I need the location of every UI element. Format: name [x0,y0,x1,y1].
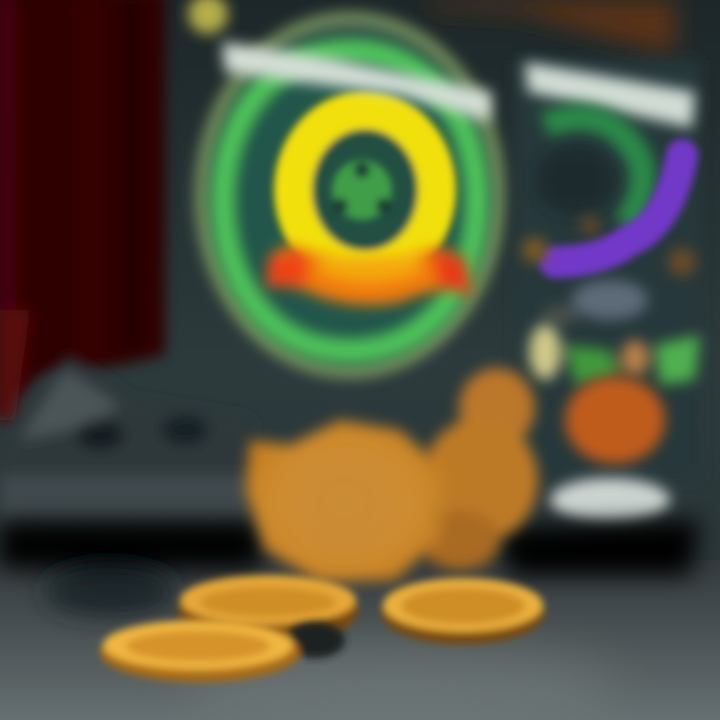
lower green and cream marks [529,324,700,385]
coin stack [245,368,538,582]
panel: large donut chart [188,0,500,373]
orange banner [266,246,472,305]
coin: front flat [100,620,345,682]
orange blob [565,376,665,464]
white title band [222,42,492,122]
coin: right flat [381,578,545,644]
outer pale ring [200,17,500,373]
yellow corner marker [188,0,228,34]
dark inner arc [535,146,615,214]
inner green symbol [332,160,392,220]
yellow ring [293,110,437,270]
red curtain [0,0,165,420]
panel: right chart [515,60,700,522]
white band [525,62,695,128]
coin: middle flat [178,575,358,644]
purple swoosh [555,155,682,262]
green arc [545,118,643,225]
rear coins [420,368,538,570]
white base [550,478,670,522]
black shadow band [0,520,700,616]
top brown shelf [430,0,675,55]
green ring [222,50,478,352]
floor [0,560,720,720]
small rust marks [522,216,696,325]
large front coin [245,420,445,582]
keyboard [0,355,260,530]
